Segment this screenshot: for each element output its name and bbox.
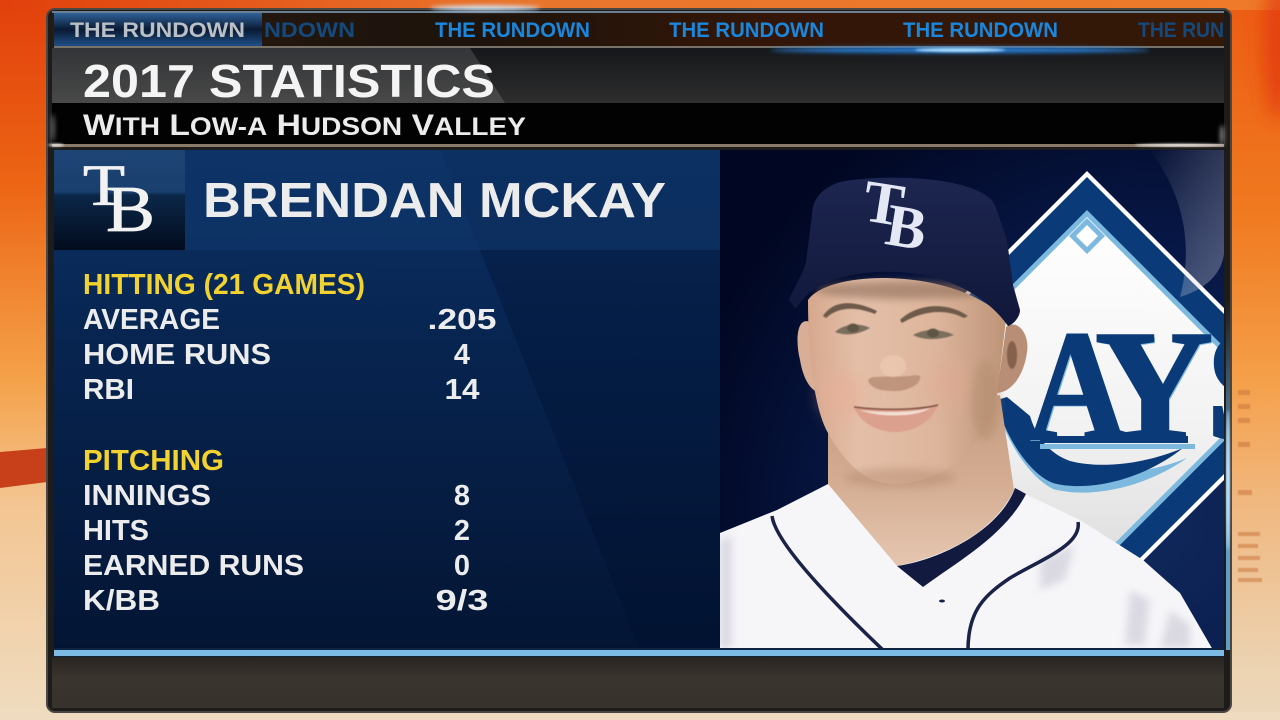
face [808, 278, 1006, 484]
pitching stat: K/BB [83, 585, 488, 617]
player name band [185, 150, 720, 250]
face shading [971, 360, 999, 440]
team wordmark: Y [1097, 301, 1215, 476]
team logo box: T [83, 153, 125, 218]
bottom bar [52, 657, 1224, 708]
jersey folds [720, 535, 1190, 648]
ticker bar [52, 13, 1224, 46]
team wordmark: A [1027, 299, 1127, 474]
corner gloss [1158, 150, 1224, 297]
cap logo: B [881, 191, 931, 263]
undershirt and collar [897, 488, 1026, 587]
pitching stat: hits: HITS [83, 515, 149, 547]
pitching stat: hits: 2 [454, 515, 470, 547]
cap logo: T [859, 168, 909, 239]
hitting stat: home runs: 4 [454, 339, 470, 371]
cap logo [866, 181, 924, 248]
stats panel [54, 150, 720, 650]
header panel [52, 48, 1224, 147]
ticker label 2: THE RUNDOWN [435, 19, 590, 42]
pitching stat: earned runs [83, 550, 470, 582]
team logo box [54, 150, 185, 250]
nose [868, 355, 920, 391]
pitching stat: earned runs: 0 [454, 550, 470, 582]
hitting stat: RBI: RBI [83, 374, 134, 406]
hitting stat: average: .205 [428, 304, 496, 336]
hitting heading: HITTING (21 GAMES) [83, 269, 365, 301]
pitching stat: K/BB: K/BB [83, 585, 160, 617]
mouth [854, 405, 938, 432]
ticker label 3: THE RUNDOWN [669, 19, 824, 42]
ticker label 4: THE RUNDOWN [903, 19, 1058, 42]
pitching stat: K/BB: 9/3 [436, 585, 488, 617]
ticker glow lines [48, 6, 1225, 146]
bottom accent line [54, 300, 1230, 657]
team logo box: B [106, 173, 155, 246]
pitching stat: hits [83, 515, 470, 547]
hitting stat: home runs [83, 339, 470, 371]
hitting stat: average: AVERAGE [83, 304, 220, 336]
team wordmark: A [1029, 301, 1129, 476]
player photo [720, 168, 1213, 650]
team wordmark: Y [1095, 299, 1213, 474]
pitching stat: earned runs: EARNED RUNS [83, 550, 304, 582]
hitting stat: RBI: 14 [444, 374, 480, 406]
Rays diamond logo [965, 171, 1224, 560]
pitching stat: innings: 8 [454, 480, 470, 512]
ticker tab [54, 13, 262, 46]
photo panel [720, 150, 1224, 648]
ticker fading label: NDOWN [264, 19, 355, 42]
swoosh [1004, 424, 1187, 493]
hitting stat: average [83, 304, 496, 336]
jersey piping [772, 516, 1078, 650]
pitching heading: PITCHING [83, 445, 224, 477]
jersey [720, 484, 1213, 650]
ticker label active: THE RUNDOWN [70, 19, 245, 42]
pitching stat: innings [83, 480, 470, 512]
pitching stat: innings: INNINGS [83, 480, 211, 512]
title: 2017 STATISTICS [83, 55, 495, 107]
cap [789, 178, 1020, 326]
team wordmark [1030, 334, 1224, 443]
ticker fading label end: THE RUN [1138, 19, 1224, 42]
eyebrows [823, 303, 968, 323]
swoosh underline [1040, 444, 1195, 449]
hitting stat: home runs: HOME RUNS [83, 339, 271, 371]
player name: BRENDAN MCKAY [203, 174, 666, 228]
subtitle: WITH LOW-A HUDSON VALLEY [83, 109, 526, 142]
eyes [835, 324, 954, 339]
ears [997, 325, 1027, 393]
neck [828, 395, 1014, 566]
hitting stat: RBI [83, 374, 480, 406]
